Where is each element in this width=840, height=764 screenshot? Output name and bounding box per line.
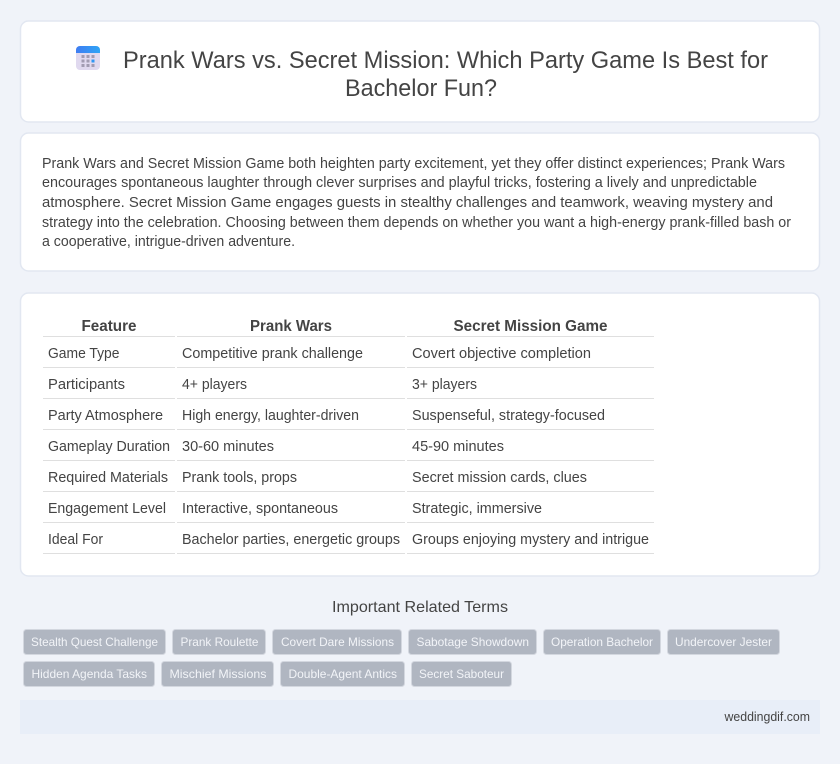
row: party atmosphere (48, 408, 605, 424)
row: required materials: Secret mission cards, clues (412, 470, 587, 486)
text block: intro: atmosphere. Secret Mission Game engages guests in stealthy challenges and teamwork, weaving mystery and (42, 195, 773, 211)
title: Bachelor Fun? (345, 75, 497, 102)
tags: related terms: Sabotage Showdown (416, 635, 529, 649)
tags: related terms: Prank Roulette (180, 635, 259, 649)
row: participants: Participants (48, 377, 125, 393)
text block: intro: strategy into the celebration. Choosing between them depends on whether you want a high-energy prank-filled bash or (42, 215, 791, 231)
tags: related terms: Stealth Quest Challenge (31, 635, 158, 649)
title (123, 47, 768, 102)
panel: intro paragraph (20, 133, 820, 271)
row: game type (48, 346, 591, 362)
text block: intro: encourages spontaneous laughter through clever surprises and playful tricks, fostering a lively and unpredictable (42, 175, 757, 191)
row: engagement level (48, 501, 542, 517)
row: required materials (48, 470, 587, 486)
row: party atmosphere: Suspenseful, strategy-focused (412, 408, 605, 424)
row: participants: 3+ players (412, 377, 477, 393)
row: ideal for: Ideal For (48, 532, 103, 548)
row: gameplay duration: 30-60 minutes (182, 439, 274, 455)
row: required materials: Required Materials (48, 470, 168, 486)
table header: Secret Mission Game (454, 318, 608, 335)
row: participants: 4+ players (182, 377, 247, 393)
row: ideal for: Bachelor parties, energetic groups (182, 532, 400, 548)
row: gameplay duration: 45-90 minutes (412, 439, 504, 455)
text block: intro: Prank Wars and Secret Mission Game both heighten party excitement, yet they offer distinct experiences; Prank Wars (42, 156, 785, 172)
tags: related terms: Secret Saboteur (419, 667, 504, 681)
heading: related terms: Important Related Terms (332, 599, 508, 616)
tags: related terms: Double-Agent Antics (288, 667, 397, 681)
tags: related terms: Hidden Agenda Tasks (32, 667, 147, 681)
title: Prank Wars vs. Secret Mission: Which Party Game Is Best for (123, 47, 768, 74)
row: game type: Competitive prank challenge (182, 346, 363, 362)
tags: related terms: Operation Bachelor (551, 635, 653, 649)
row: engagement level: Interactive, spontaneous (182, 501, 338, 517)
table header: Prank Wars (250, 318, 332, 335)
row: party atmosphere: High energy, laughter-driven (182, 408, 359, 424)
row: gameplay duration (48, 439, 504, 455)
row: game type: Covert objective completion (412, 346, 591, 362)
tags: related terms (24, 630, 780, 686)
row: required materials: Prank tools, props (182, 470, 297, 486)
panel: title card (20, 21, 820, 122)
tags: related terms: Covert Dare Missions (281, 635, 394, 649)
row: participants (48, 377, 477, 393)
row: ideal for (48, 532, 649, 548)
panel: comparison table (20, 293, 820, 576)
tags: related terms: Mischief Missions (170, 667, 266, 681)
footer (20, 700, 820, 734)
table header: Feature (82, 318, 137, 335)
tags: related terms: Undercover Jester (675, 635, 772, 649)
icon: calendar (76, 46, 100, 70)
row: engagement level: Engagement Level (48, 501, 166, 517)
text block: intro: a cooperative, intrigue-driven adventure. (42, 234, 295, 250)
footer: weddingdif.com (724, 709, 810, 724)
row: game type: Game Type (48, 346, 120, 362)
row: gameplay duration: Gameplay Duration (48, 439, 170, 455)
row: party atmosphere: Party Atmosphere (48, 408, 163, 424)
row: engagement level: Strategic, immersive (412, 501, 542, 517)
table header (82, 318, 608, 335)
text block: intro (42, 156, 791, 250)
row: ideal for: Groups enjoying mystery and intrigue (412, 532, 649, 548)
